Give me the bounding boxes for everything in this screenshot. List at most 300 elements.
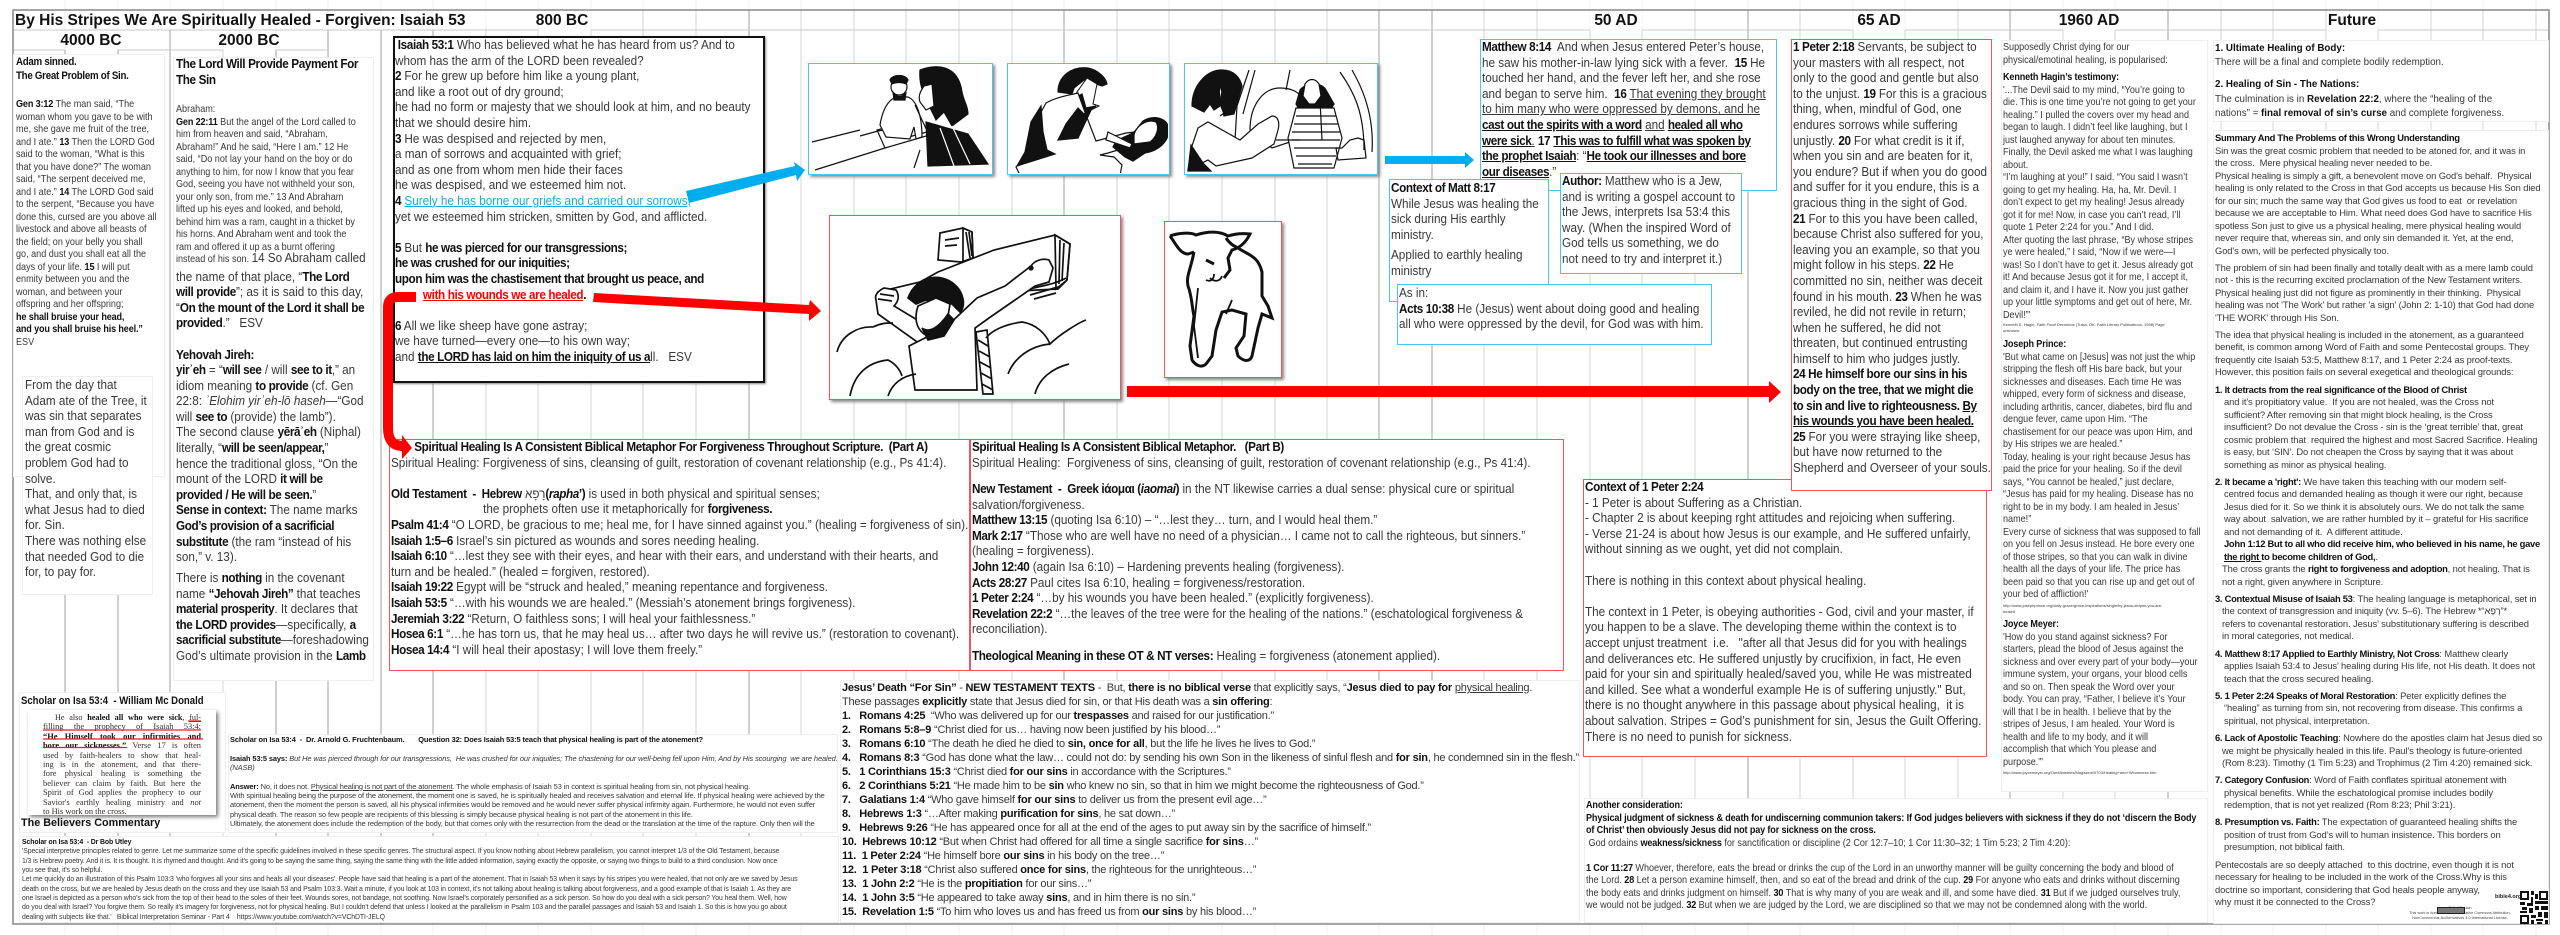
text: Utley quotation: do you deal with Israel? You forgive them. So really it's imagery for forgiveness, not for physical healing. But I couldn't defend that unless I looked at the parallelism in Psalm 103 and the parallel passages and Isaiah 53 and Isaiah 1. So this is how you go about	[22, 902, 787, 911]
text: Isaiah 53 verses: he had no form or majesty that we should look at him, and no beauty	[395, 100, 750, 114]
text: context notes: The context in 1 Peter, is obeying authorities - God, civil and your master, if	[1585, 605, 1974, 619]
text: summary arguments: Pentecostals are so deeply attached to this doctrine, even though it is not	[2215, 859, 2514, 870]
text: 1 Peter passage: to the unjust. 19 For this is a gracious	[1793, 87, 1987, 101]
text: Yehovah Jireh meaning	[176, 348, 363, 564]
text: Fruchtenbaum answer: With spiritual healing being the purpose of the atonement, the moment one is saved, he is spiritually healed and receives salvation and eternal life. If physical healing were achieved by the	[230, 791, 825, 800]
text: Joyce Meyer: accomplish that which You please and	[2003, 744, 2156, 755]
text: Genesis 3: offspring and her offspring;	[16, 299, 124, 310]
text: Isaiah 53 verses: whom has the arm of the LORD been revealed?	[395, 54, 644, 68]
text: Isaiah 53 verses: 2 For he grew up before him like a young plant,	[395, 69, 639, 83]
text: Genesis 3: livestock and above all beasts of	[16, 224, 147, 235]
text: 1 Peter passage: because Christ also suffered for you,	[1793, 227, 1984, 241]
text: summary arguments: 1. It detracts from the real significance of the Blood of Christ	[2215, 384, 2467, 395]
text: ultimate healing: There will be a final and complete bodily redemption.	[2215, 57, 2444, 68]
text: nothing about material prosperity: sacrificial substitute—foreshadowing	[176, 633, 369, 647]
panel: the Lord will provide	[173, 57, 374, 681]
era label: 800 BC: 800 BC	[536, 12, 588, 29]
panel: 1 Peter 2:18-25	[1791, 39, 1992, 491]
text: ultimate healing: 1. Ultimate Healing of Body:	[2215, 43, 2345, 54]
text: Genesis 3: Gen 3:12 The man said, “The	[16, 99, 134, 110]
text: 1 Peter passage: to sin and live to righteousness. By	[1793, 399, 1977, 413]
text: Joseph Prince: your bed of affliction!'	[2003, 589, 2088, 600]
text: Genesis 3	[16, 99, 157, 348]
text: what Jesus had to die for: for. Sin.	[25, 518, 65, 532]
text: Kenneth Hagin testimony: die. This is one time you’re not going to get your	[2003, 97, 2196, 108]
text: Part A heading and verses: Isaiah 53:5 “…with his wounds we are healed.” (Messiah’s atonement brings forgiveness).	[391, 596, 855, 610]
heading: the Lord will provide payment	[176, 57, 358, 87]
panel: Matthew 8:14-17	[1480, 39, 1777, 191]
text: Matthew passage: our diseases.”	[1482, 165, 1556, 179]
text: Kenneth Hagin testimony: quote 1 Peter 2:24 for you.” And I did.	[2003, 222, 2154, 233]
scan: Believers Commentary excerpt: used by faith-healers to show that heal-	[43, 751, 201, 760]
text: context notes: about salvation. Stripes = God’s punishment for sin, Jesus the Guilt Offering.	[1585, 714, 1981, 728]
image: Jesus on the cross	[829, 215, 1121, 400]
text: 1 Peter passage: when you sin and are beaten for it,	[1793, 149, 1973, 163]
panel: context of Matt 8:17	[1389, 179, 1549, 302]
panel: Part A Old Testament metaphor	[389, 439, 970, 671]
text: Joseph Prince: on you fell on Jesus instead. He bore every one	[2003, 539, 2195, 550]
era label: 1960 AD: 1960 AD	[2059, 12, 2119, 29]
text: Joyce Meyer: health and life to my body, and it will	[2003, 732, 2148, 742]
text: 1 Peter passage: your masters with all respect, not	[1793, 56, 1964, 70]
text: summary arguments: 2. It became a 'right': We have taken this teaching with our modern self-	[2215, 476, 2506, 487]
title: By His Stripes We Are Spiritually Healed - Forgiven: Isaiah 53	[15, 12, 466, 29]
text: as in Acts	[1399, 286, 1704, 331]
text: summary arguments: However, this position fails on several exegetical and theological grounds:	[2215, 366, 2513, 377]
panel: Adam sinned	[13, 54, 165, 477]
arrow: blue from Isaiah 53:4 to healing pictures	[686, 162, 805, 203]
text: Yehovah Jireh meaning: Sense in context: The name marks	[176, 503, 358, 517]
text: summary arguments: the context of transgression and iniquity (vv. 5–6). The Hebrew *“רָפָא”*	[2222, 605, 2507, 616]
icon: QR code	[2520, 891, 2548, 924]
text: NT texts list: 14. 1 John 3:5 “He appeared to take away sins, and in him there is no sin.”	[842, 892, 1195, 904]
underline highlights in red	[43, 720, 203, 748]
text: Part A heading and verses: Isaiah 6:10 “…lest they see with their eyes, and hear with their ears, and understand with their hearts, and	[391, 549, 938, 563]
text: Part B verses: (healing = forgiveness).	[972, 544, 1094, 558]
text: Joyce Meyer: and so on. Then speak the Word over your	[2003, 682, 2175, 692]
text: Joseph Prince: of those stripes, so that you can walk in divine	[2003, 552, 2187, 562]
text: Isaiah 53 verses: and the LORD has laid on him the iniquity of us all. ESV	[395, 350, 692, 364]
text: Genesis 22: God, seeing you have not withheld your son,	[176, 179, 355, 190]
text: Utley quotation: you see that, it's so helpful.	[22, 865, 102, 874]
text: NT texts list: 7. Galatians 1:4 “Who gave himself for our sins to deliver us from the present evil age…”	[842, 794, 1266, 806]
text: Matthew passage: he saw his mother-in-law lying sick with a fever. 15 He	[1482, 56, 1765, 70]
text: Kenneth Hagin testimony: Devil!”'	[2003, 310, 2030, 320]
text: Genesis 22: your only son, from me.” 13 And Abraham	[176, 192, 343, 202]
text: Part A heading and verses: Spiritual Healing Is A Consistent Biblical Metaphor For Forgiveness Throughout Scripture. (Part A)	[414, 440, 928, 454]
text: Kenneth Hagin testimony: going to get my healing. Ha, ha, Mr. Devil. I	[2003, 184, 2176, 196]
text: sickness and communion: we would not be judged. 32 But when we are judged by the Lord, we are disciplined so that we may not be condemned along with the world.	[1586, 900, 2147, 911]
text: Part B verses	[972, 482, 1525, 636]
text: Joyce Meyer: body. You can pray, “Father, I believe it’s Your	[2003, 694, 2185, 705]
text: Utley quotation: Scholar on Isa 53:4 - Dr Bob Utley	[22, 837, 131, 846]
text: Matthew as author: way. (When the inspired Word of	[1562, 221, 1731, 235]
text: ultimate healing: nations” = final removal of sin’s curse and complete forgiveness.	[2215, 108, 2504, 119]
text: Kenneth Hagin testimony: '...The Devil said to my mind, “You’re going to	[2003, 84, 2185, 96]
text: Part B heading	[972, 440, 1531, 470]
text: summary arguments: necessary for healing to be included in the work of the Cross.Why is this	[2215, 871, 2507, 882]
text: Joseph Prince: by His stripes we are healed.”	[2003, 439, 2122, 450]
text: Joseph Prince: dengue fever, came upon Him. “The	[2003, 414, 2148, 425]
text: the Lord will provide verse: “On the mount of the Lord it shall be	[176, 301, 364, 315]
text: Joyce Meyer	[2003, 619, 2198, 768]
era label: Future: Future	[2328, 12, 2376, 29]
scan: Believers Commentary excerpt: fore physical healing is something the	[43, 769, 201, 778]
scan: Believers Commentary excerpt: Spirit of God applies the prophecy to our	[43, 788, 201, 797]
text: Yehovah Jireh meaning: 22:8: ʾElohim yirʾeh-lō haseh—“God	[176, 394, 363, 408]
text: Isaiah 53 verses: a man of sorrows and acquainted with grief;	[395, 147, 622, 161]
image: Jesus and man on stretcher	[808, 63, 993, 175]
text: Matthew passage: the prophet Isaiah: “He took our illnesses and bore	[1482, 149, 1746, 163]
text: NT texts list: These passages explicitly state that Jesus died for sin, or that His death was a sin offering:	[842, 696, 1272, 708]
text: Fruchtenbaum answer: Ultimately, the atonement does include the redemption of the body, but that comes only with the resurrection from the dead or the translation at the time of the rapture. Only then will the	[230, 819, 815, 828]
text: Kenneth Hagin testimony: about.	[2003, 160, 2028, 170]
panel: scholar Bob Utley	[19, 836, 839, 923]
text: summary arguments: something as minor as physical healing.	[2224, 459, 2386, 470]
text: summary arguments: The cross grants the right to forgiveness and adoption, not healing. That is	[2222, 563, 2530, 574]
text: Isaiah 53 verses: Isaiah 53:1 Who has believed what he has heard from us? And to	[398, 38, 735, 52]
text: Utley quotation	[22, 837, 798, 921]
text: Part B verses: John 12:40 (again Isa 6:10) – Hardening prevents healing (forgiveness).	[972, 560, 1345, 574]
footnote: Prince source	[2003, 603, 2162, 614]
text: 1 Peter passage: you endure? But if when you do good	[1793, 165, 1987, 179]
caption: The Believers Commentary: The Believers Commentary	[21, 817, 160, 829]
text: Part A heading and verses: the prophets often use it metaphorically for forgiveness.	[483, 502, 772, 516]
era label: 50 AD: 50 AD	[1594, 12, 1638, 29]
text: what Jesus had to die for: There was nothing else	[25, 534, 146, 548]
text: Fruchtenbaum answer	[230, 735, 838, 828]
text: summary arguments: Physical healing just did not figure as prominently in their thinking. Physical	[2215, 287, 2521, 298]
text: Joseph Prince: 'But what came on [Jesus] was not just the whip	[2003, 352, 2195, 362]
text: Genesis 22: Abraham:	[176, 104, 215, 115]
text: summary arguments: and it's propitiatory value. If you are not healed, was the Cross not	[2224, 396, 2494, 407]
text: NT texts list: 1. Romans 4:25 “Who was delivered up for our trespasses and raised for our justification.”	[842, 710, 1274, 722]
text: 1 Peter passage: 1 Peter 2:18 Servants, be subject to	[1793, 40, 1977, 54]
panel: scholar William McDonald	[19, 692, 226, 833]
text: summary arguments: 3. Contextual Misuse of Isaiah 53: The healing language is metaphorical, set in	[2215, 593, 2537, 604]
text: summary arguments: “healing” as turning from sin, not recovering from disease. This confirms a	[2224, 702, 2522, 713]
text: Genesis 22: ram and offered it up as a burnt offering	[176, 242, 335, 252]
text: 1 Peter passage: threaten, but continued entrusting	[1793, 336, 1968, 350]
text: nothing about material prosperity: There is nothing in the covenant	[176, 571, 345, 585]
panel: Acts 10:38	[1397, 284, 1712, 345]
text: what Jesus had to die for: was sin that separates	[25, 409, 142, 423]
text: Genesis 22: his horns. And Abraham went and took the	[176, 229, 346, 240]
text: Yehovah Jireh meaning: provided / He will be seen.”	[176, 488, 316, 502]
text: summary arguments: doctrine so important, considering that God heals people anyway,	[2215, 884, 2480, 895]
text: Joyce Meyer: immune system, your organs, your blood cells	[2003, 669, 2187, 680]
text: 1 Peter passage: his wounds you have been healed.	[1793, 414, 1974, 428]
text: Yehovah Jireh meaning: yirʾeh = “will see / will see to it,” an	[176, 363, 355, 377]
text: Genesis 3: he shall bruise your head,	[16, 312, 124, 322]
text: Genesis 22: said, “Do not lay your hand on the boy or do	[176, 154, 352, 165]
arrow: blue to Matthew 8	[1385, 152, 1474, 168]
text: Isaiah 53 verses: 5 But he was pierced for our transgressions;	[395, 241, 627, 255]
text: Part B verses: Matthew 13:15 (quoting Isa 6:10) – “…lest they… turn, and I would heal them.”	[972, 513, 1377, 527]
image: Jesus raising Lazarus	[1184, 63, 1378, 175]
text: Kenneth Hagin testimony: was! So I don’t have to get it. Jesus already got	[2003, 260, 2193, 270]
text: summary arguments: teach that the cross secured healing.	[2224, 673, 2374, 684]
text: Joyce Meyer: sickness and over every part of your body—your	[2003, 656, 2198, 668]
image: Jesus healing the woman	[1007, 63, 1170, 175]
panel: Isaiah 53 passage	[393, 36, 765, 383]
text: Isaiah 53 verses: upon him was the chastisement that brought us peace, and	[395, 272, 704, 286]
text: NT texts list: 6. 2 Corinthians 5:21 “He made him to be sin who knew no sin, so that in him we might become the righteousness of God.”	[842, 780, 1424, 792]
text: Joseph Prince: been paid so that you can rise up and get out of	[2003, 576, 2195, 588]
text: summary arguments: we might be physically healed in this life. Paul’s theology is future-oriented	[2222, 744, 2522, 756]
text: Kenneth Hagin testimony: it! And because Jesus got it for me, I accept it,	[2003, 272, 2188, 283]
text: summary arguments: physical benefits. While the eschatological promise includes bodily	[2224, 787, 2493, 798]
text: sickness and communion	[1586, 800, 2196, 911]
text: Part A heading and verses: Old Testament - Hebrew רָפָא(rapha’) is used in both physical and spiritual senses;	[391, 487, 820, 501]
text: summary arguments: The idea that physical healing is included in the atonement, as a guaranteed	[2215, 329, 2524, 340]
text: context notes: without sinning as we ought, yet did not complain.	[1585, 542, 1843, 556]
scan: Believers Commentary excerpt: filling the prophecy of Isaiah 53:4:	[43, 722, 201, 731]
text: nothing about material prosperity: the LORD provides—specifically, a	[176, 618, 356, 632]
text: NT texts list: 15. Revelation 1:5 “To him who loves us and has freed us from our sins by his blood…”	[842, 906, 1256, 918]
heading: the great problem of sin: Adam sinned.	[16, 56, 76, 68]
text: Yehovah Jireh meaning: The second clause yērāʾeh (Niphal)	[176, 425, 361, 439]
text: Part A heading and verses: Psalm 41:4 “O LORD, be gracious to me; heal me, for I have sinned against you.” (healing = forgiveness of sin).	[391, 518, 968, 532]
text: 1 Peter passage: unjustly. 20 For what credit is it if,	[1793, 134, 1965, 148]
text: Isaiah 53 verses: 3 He was despised and rejected by men,	[395, 132, 606, 146]
text: Genesis 22: anything to him, for now I know that you fear	[176, 166, 354, 178]
text: the Lord will provide verse: will provide”; as it is said to this day,	[176, 285, 363, 299]
text: Joseph Prince: Every curse of sickness that was supposed to fall	[2003, 526, 2201, 538]
text: NT texts list: 4. Romans 8:3 “God has done what the law… could not do: by sending his own Son in the likeness of sinful flesh and for sin, he condemned sin in the flesh.”	[842, 752, 1579, 764]
text: sickness and communion: of Christ’ then obviously Jesus did not pay for sickness on the cross.	[1586, 825, 1876, 836]
text: Kenneth Hagin testimony: just laughed anyway for about ten minutes.	[2003, 134, 2175, 146]
text: Joyce Meyer: 'How do you stand against sickness? For	[2003, 632, 2168, 642]
text: NT texts list: 10. Hebrews 10:12 “But when Christ had offered for all time a single sacrifice for sins…”	[842, 836, 1258, 848]
text: summary arguments: healing was not 'The Work' but rather 'a sign' (John 2: 1-10) that God had done	[2215, 299, 2534, 310]
text: Genesis 22: instead of his son. 14 So Abraham called	[176, 250, 366, 265]
text: what Jesus had to die for: what Jesus had to died	[25, 503, 145, 517]
text: Yehovah Jireh meaning: mount of the LORD it will be	[176, 472, 323, 486]
text: Joseph Prince: stripping the flesh off His bare back, but your	[2003, 364, 2182, 375]
text: Genesis 3: go, and dust you shall eat all the	[16, 249, 146, 260]
text: nothing about material prosperity: name “Jehovah Jireh” that teaches	[176, 587, 361, 601]
text: earthly ministry context: sick during His earthly	[1391, 212, 1506, 226]
text: summary arguments: healing is only related to the Cross in that God accepts us because His Son died	[2215, 182, 2541, 193]
text: summary arguments: frequently cite Isaiah 53:5, Matthew 8:17, and 1 Peter 2:24 as proof-texts.	[2215, 354, 2512, 365]
text: Yehovah Jireh meaning: Yehovah Jireh:	[176, 348, 254, 362]
text: sickness and communion: the Lord. 28 Let a person examine himself, then, and so eat of the bread and drink of the cup. 29 For anyone who eats and drinks without discerning	[1586, 875, 2180, 886]
text: Part B heading: Spiritual Healing: Forgiveness of sins, cleansing of guilt, restoration of covenant relationship (e.g., Ps 41:4).	[972, 456, 1531, 470]
text: earthly ministry context: Context of Matt 8:17	[1391, 181, 1495, 195]
text: what Jesus had to die for: Adam ate of the Tree, it	[25, 394, 147, 408]
text: Matthew passage: Matthew 8:14 And when Jesus entered Peter’s house,	[1482, 40, 1764, 54]
text: summary arguments: for our sin; much the same way that God gives us food to eat or revelation	[2215, 194, 2517, 206]
text: summary arguments: Sin was the great cosmic problem that needed to be atoned for, and it was in	[2215, 144, 2525, 156]
text: 1 Peter passage: himself to him who judges justly.	[1793, 352, 1960, 366]
text: ultimate healing	[2215, 43, 2504, 119]
text: what Jesus had to die for: That, and only that, is	[25, 487, 137, 501]
text: Yehovah Jireh meaning: will see to (provide) the lamb”).	[176, 410, 336, 424]
text: Isaiah 53 verses: and like a root out of dry ground;	[395, 85, 564, 99]
text: Joyce Meyer: purpose.”'	[2003, 756, 2043, 768]
text: 1 Peter passage: reviled, he did not revile in return;	[1793, 305, 1966, 319]
heading: the great problem of sin	[16, 56, 129, 82]
text: as in Acts: all who were oppressed by the devil, for God was with him.	[1399, 317, 1704, 331]
text: Genesis 22	[176, 104, 366, 265]
badge: creative commons	[2437, 907, 2465, 914]
text: Joseph Prince: sicknesses and diseases. Each time He was	[2003, 376, 2181, 388]
text: context notes: paid for your sin and spiritually healed/saved you, while He was mistreated	[1585, 667, 1972, 681]
text: Genesis 3: to the serpent, “Because you have	[16, 199, 154, 210]
text: summary arguments: John 1:12 But to all who did receive him, who believed in his name, he gave	[2224, 538, 2540, 549]
text: Joyce Meyer: Joyce Meyer:	[2003, 619, 2059, 630]
text: the Lord will provide verse: provided.” ESV	[176, 316, 263, 330]
footnote: Hagin source: Kenneth E. Hagin, Faith Food Devotions (Tulsa, OK: Faith Library Publications, 1998) Page	[2003, 322, 2165, 327]
text: Fruchtenbaum answer: Answer: No, it does not. Physical healing is not part of the atonement. The whole emphasis of Isaiah 53 in context is spiritual healing from sin, not physical healing.	[230, 782, 750, 791]
text: Matthew passage: cast out the spirits with a word and healed all who	[1482, 118, 1743, 132]
text: context notes: There is no need to punish for sickness.	[1585, 730, 1792, 744]
text: Joseph Prince: right to be in my body. I am healed in Jesus’	[2003, 502, 2179, 512]
text: Utley quotation: death on the cross, but we are healed by Jesus death on the cross and they use Isaiah 53 and Psalm 103:3. Wait a minute, if you look at 103 in context, it's not talking about healing is talking about forgiveness, and a good example of that is Isaiah 1. As they are	[22, 884, 791, 893]
text: 1 Peter passage: endures sorrows while suffering	[1793, 118, 1957, 132]
panel: summary and problems	[2213, 130, 2549, 924]
text: Joseph Prince: says, “You cannot be healed,” just declare,	[2003, 476, 2174, 488]
text: Genesis 3: woman, and between your	[16, 286, 122, 298]
text: summary arguments: centred focus and demanded healing as though it were our right, because	[2224, 488, 2523, 499]
text: Genesis 3: woman whom you gave to be with	[16, 112, 153, 122]
text: NT texts list: 8. Hebrews 1:3 “…After making purification for sins, he sat down…”	[842, 808, 1175, 820]
text: context notes: and killed. See what a wonderful example He is of suffering unjustly." But,	[1585, 683, 1966, 697]
text: summary arguments: Physical healing is simply a gift, a benevolent move on God's behalf. Physical	[2215, 170, 2531, 180]
text: what Jesus had to die for: the great cosmic	[25, 440, 111, 454]
text: summary arguments: presumption, not biblical faith.	[2224, 841, 2345, 852]
text: Fruchtenbaum answer: (NASB)	[230, 763, 255, 772]
text: Kenneth Hagin testimony: up your little symptoms and get out of here, Mr.	[2003, 297, 2192, 308]
scan: Believers Commentary excerpt: to His work on the cross.	[43, 807, 127, 816]
text: Joseph Prince: Joseph Prince:	[2003, 339, 2066, 350]
heading: the great problem of sin: The Great Problem of Sin.	[16, 70, 129, 82]
text: Joseph Prince: paid the price for your healing. So if the devil	[2003, 464, 2182, 475]
text: nothing about material prosperity	[176, 571, 369, 663]
callout: sin the cosmic problem	[22, 376, 153, 595]
text: Joseph Prince: including arthritis, cancer, diabetes, bird flu and	[2003, 402, 2192, 412]
text: 1 Peter passage: 25 For you were straying like sheep,	[1793, 430, 1980, 444]
text: Genesis 22: Abraham!” And he said, “Here I am.” 12 He	[176, 142, 348, 152]
text: Utley quotation: dealing with subjects like that.' Biblical Interpretation Seminar - Part 4 https://www.youtube.com/watch?v=VChDTI-JELQ	[22, 912, 385, 921]
text: Matthew passage: to him many who were oppressed by demons, and he	[1482, 102, 1760, 116]
arrow: red from Isaiah 53:5 to crucifixion	[593, 293, 821, 321]
text: context notes	[1585, 480, 1981, 744]
text: summary arguments: Summary And The Problems of this Wrong Understanding	[2215, 132, 2460, 143]
text: Genesis 22: him from heaven and said, “Abraham,	[176, 129, 328, 140]
scan: Believers Commentary excerpt: “He Himself took our infirmities and	[43, 732, 201, 741]
text: Part B verses: Revelation 22:2 “…the leaves of the tree were for the healing of the nations.” (eschatological forgiveness &	[972, 607, 1523, 621]
text: Isaiah 53 verses: and as one from whom men hide their faces	[395, 163, 623, 177]
text: Matthew as author: not need to try and interpret it.)	[1562, 252, 1722, 266]
text: Part B verses: Acts 28:27 Paul cites Isa 6:10, healing = forgiveness/restoration.	[972, 576, 1305, 590]
era label: 65 AD: 65 AD	[1857, 12, 1901, 29]
text: summary arguments: The problem of sin had been finally and totally dealt with as a mere lamb could	[2215, 262, 2533, 273]
text: summary arguments: position of trust from God’s will to human insistence. This borders on	[2224, 829, 2501, 840]
text: Matthew passage: were sick. 17 This was to fulfill what was spoken by	[1482, 134, 1751, 148]
text: Matthew passage	[1482, 40, 1766, 179]
text: ultimate healing: The culmination is in Revelation 22:2, where the “healing of the	[2215, 94, 2492, 105]
text: Joseph Prince: whipped, every form of sickness and disease,	[2003, 389, 2186, 400]
text: 1 Peter passage	[1793, 40, 1991, 475]
footnote: Meyer source: http://www.joycemeyer.org/OurMinistries/Magazine/0703/Healing+and+Wholeness.htm	[2003, 770, 2156, 775]
text: Yehovah Jireh meaning: hence the traditional gloss, “On the	[176, 457, 358, 471]
text: Part B verses: Mark 2:17 “Those who are well have no need of a physician… I came not to call the righteous, but sinners.”	[972, 529, 1525, 543]
text: 1 Peter passage: 21 For to this you have been called,	[1793, 212, 1978, 226]
text: context notes: - Chapter 2 is about keeping rght attitudes and rejoicing when suffering.	[1585, 511, 1955, 525]
text: Yehovah Jireh meaning: God’s provision of a sacrificial	[176, 519, 334, 533]
text: as in Acts: Acts 10:38 He (Jesus) went about doing good and healing	[1399, 302, 1699, 316]
text: 1 Peter passage: might follow in his steps. 22 He	[1793, 258, 1954, 272]
text: Part B verses: salvation/forgiveness.	[972, 498, 1085, 512]
text: NT texts list: 13. 1 John 2:2 “He is the propitiation for our sins…”	[842, 878, 1091, 890]
text: Part A heading and verses: Jeremiah 3:22 “Return, O faithless sons; I will heal your faithlessness.”	[391, 612, 755, 626]
text: sickness and communion: 1 Cor 11:27 Whoever, therefore, eats the bread or drinks the cup of the Lord in an unworthy manner will be guilty concerning the body and blood of	[1586, 862, 2174, 874]
scan: Believers Commentary excerpt: ing is in the atonement, and that there-	[43, 760, 201, 769]
text: Genesis 3: ESV	[16, 336, 34, 348]
text: summary arguments: 7. Category Confusion: Word of Faith conflates spiritual atonement with	[2215, 774, 2507, 785]
text: Joyce Meyer: stripes of Jesus, I am healed. Your Word is	[2003, 719, 2175, 730]
panel: modern teachers 1960 AD	[2001, 40, 2208, 792]
text: summary arguments: way about salvation, we are rather humbled by it – grateful for His sacrifice	[2224, 513, 2528, 524]
text: Isaiah 53 verses: with his wounds we are healed.	[423, 288, 586, 302]
text: Isaiah 53 verses	[395, 38, 750, 364]
credit: license note: This work is licensed under a Creative Commons Attribution-NonCommercial-NoDerivatives 4.0 International License.	[2409, 911, 2511, 920]
scan: Believers Commentary excerpt	[28, 710, 216, 815]
text: Joseph Prince: “Jesus has paid for my healing. Disease has no	[2003, 489, 2194, 500]
text: 1 Peter passage: gracious thing in the sight of God.	[1793, 196, 1967, 210]
text: Genesis 3: me, she gave me fruit of the tree,	[16, 124, 149, 135]
arrow: long red to 1 Peter 2:24	[1127, 381, 1781, 403]
text: sickness and communion: Another consideration:	[1586, 800, 1683, 811]
text: NT texts list: 12. 1 Peter 3:18 “Christ also suffered once for sins, the righteous for the unrighteous…”	[842, 864, 1256, 876]
text: 1 Peter passage: leaving you an example, so that you	[1793, 243, 1980, 257]
text: context notes: there is no thought anywhere in this passage about physical healing, it is	[1585, 698, 1964, 712]
text: summary arguments: Jesus died for it. So we think it is absolutely ours. We do not talk the same	[2224, 501, 2524, 512]
text: 1 Peter passage: found in his mouth. 23 When he was	[1793, 290, 1982, 304]
text: Kenneth Hagin testimony: got it for me! Now, in case you can’t read, I’ll	[2003, 210, 2180, 220]
text: context notes: you happen to be a slave. The developing theme within the context is to	[1585, 620, 1957, 634]
text: Genesis 3: the field; on your belly you shall	[16, 236, 143, 248]
text: popularised intro: Supposedly Christ dying for our	[2003, 42, 2130, 53]
text: summary arguments	[2215, 132, 2542, 907]
text: Genesis 22: behind him was a ram, caught in a thicket by	[176, 216, 355, 228]
scan: Believers Commentary excerpt: He also healed all who were sick, ful-	[55, 713, 201, 722]
scan: Believers Commentary excerpt: Savior's earthly healing ministry and not	[43, 798, 201, 807]
text: Part A heading and verses	[391, 440, 968, 657]
text: NT texts list: Jesus’ Death “For Sin” - NEW TESTAMENT TEXTS - But, there is no biblical verse that explicitly says, “Jesus died to pay for physical healing.	[842, 682, 1532, 694]
text: Matthew passage: touched her hand, and the fever left her, and she rose	[1482, 71, 1761, 85]
text: 1 Peter passage: but have now returned to the	[1793, 445, 1942, 459]
panel: Jesus' death for sin	[840, 680, 1580, 923]
text: Genesis 22: lifted up his eyes and looked, and behold,	[176, 204, 343, 215]
text: Isaiah 53 verses: 4 Surely he has borne our griefs and carried our sorrows,	[395, 194, 691, 208]
text: Kenneth Hagin testimony: don’t expect to get my healing! Jesus already	[2003, 197, 2184, 208]
text: Kenneth Hagin testimony: healing.” I pulled the covers over my head and	[2003, 110, 2189, 120]
text: Joseph Prince	[2003, 339, 2201, 600]
text: Part A heading and verses: Hosea 14:4 “I will heal their apostasy; I will love them freely.”	[391, 643, 702, 657]
era label: 4000 BC: 4000 BC	[60, 32, 122, 49]
text: summary arguments: spotless Son just to give us a physical healing, mere physical healing would	[2215, 220, 2521, 230]
text: Genesis 3: said to the woman, “What is this	[16, 149, 145, 160]
text: Part B verses: New Testament - Greek ἰάομαι (iaomai) in the NT likewise carries a dual sense: physical cure or spiritual	[972, 482, 1514, 496]
text: 1 Peter passage: 24 He himself bore our sins in his	[1793, 367, 1967, 381]
text: Part B verses: 1 Peter 2:24 “…by his wounds you have been healed.” (explicitly forgiveness).	[972, 591, 1374, 605]
credit: license note	[2409, 906, 2511, 920]
text: what Jesus had to die for: problem God had to	[25, 456, 129, 470]
text: Isaiah 53 verses: he was despised, and we esteemed him not.	[395, 178, 626, 192]
